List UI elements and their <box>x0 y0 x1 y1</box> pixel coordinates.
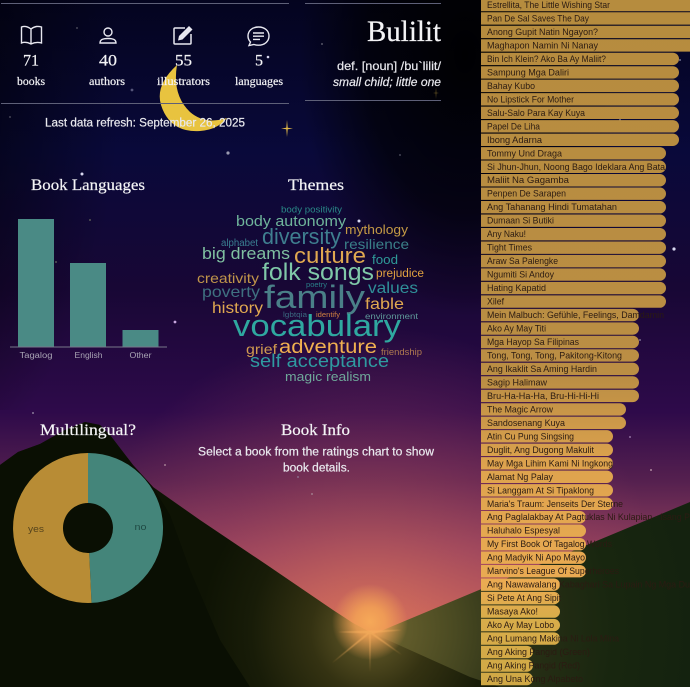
bar labels: Atin Cu Pung Singsing <box>487 431 574 442</box>
word cloud: environment <box>365 312 419 321</box>
bar labels: Ang Tahanang Hindi Tumatahan <box>487 202 617 213</box>
stat: books <box>17 26 45 88</box>
last data refresh: Last data refresh: September 26, 2025 <box>45 118 245 130</box>
bar labels: Si Pete At Ang Sipit <box>487 593 561 604</box>
title: Bulilit <box>367 15 442 48</box>
bar labels: Anong Gupit Natin Ngayon? <box>487 27 598 38</box>
word cloud: friendship <box>381 347 422 357</box>
bar chart <box>10 219 167 360</box>
panel: book info <box>198 422 435 474</box>
bar labels: Xilef <box>487 297 504 308</box>
word cloud: diversity <box>262 224 341 249</box>
bar labels: Ang Aking Pangid (Red) <box>487 661 580 672</box>
bar labels: No Lipstick For Mother <box>487 94 574 105</box>
bar labels: Bahay Kubo <box>487 81 535 92</box>
word cloud: mythology <box>345 222 409 237</box>
bar labels: Maria's Traum: Jenseits Der Sterne <box>487 499 623 510</box>
stat: languages: 5 <box>255 52 263 70</box>
bar labels: Dumaan Si Butiki <box>487 216 554 227</box>
bar labels: Ang Madyik Ni Apo Mayo <box>487 553 585 564</box>
heading: Book Languages <box>31 177 145 194</box>
bar labels: Tong, Tong, Tong, Pakitong-Kitong <box>487 350 622 361</box>
mountain: dark foreground <box>0 422 250 687</box>
bar labels: Estrellita, The Little Wishing Star <box>487 0 610 11</box>
moon <box>160 65 227 131</box>
header rules <box>1 4 441 104</box>
bar labels: Duglit, Ang Dugong Makulit <box>487 445 594 456</box>
panel: themes <box>197 177 424 384</box>
stat: books: books <box>17 74 45 88</box>
stat: languages: languages <box>235 74 283 88</box>
word cloud: vocabulary <box>233 308 402 343</box>
heading: Book Info <box>281 422 350 439</box>
panel: multilingual <box>13 422 163 603</box>
bar labels: Ako Ay May Lobo <box>487 620 554 631</box>
word cloud: family <box>264 279 365 315</box>
word cloud: body positivity <box>281 205 342 216</box>
bar labels: Pan De Sal Saves The Day <box>487 13 589 24</box>
stat: languages <box>235 27 283 88</box>
word cloud: folk songs <box>262 259 374 286</box>
word cloud: history <box>212 300 263 317</box>
instructions: Select a book from the ratings chart to show <box>198 446 435 458</box>
word cloud: self acceptance <box>250 351 389 371</box>
bar labels: Alamat Ng Palay <box>487 472 553 483</box>
bar labels: Mga Hayop Sa Filipinas <box>487 337 579 348</box>
bar labels: Hating Kapatid <box>487 283 546 294</box>
word cloud: food <box>372 252 398 267</box>
stat: authors: authors <box>89 74 125 88</box>
bar labels: Ngumiti Si Andoy <box>487 270 554 281</box>
word cloud: poverty <box>202 284 260 301</box>
word cloud <box>197 205 424 384</box>
definition: small child; little one <box>333 75 441 89</box>
definition: def. [noun] /bu`lilit/ <box>337 59 442 73</box>
bar labels: Ang Ikaklit Sa Aming Hardin <box>487 364 597 375</box>
instructions <box>198 446 435 474</box>
bar labels: Tight Times <box>487 243 532 254</box>
bar labels: Ako Ay May Titi <box>487 324 546 335</box>
icon: speech bubble <box>248 27 269 46</box>
bar chart: English <box>74 351 102 360</box>
bar labels: Sagip Halimaw <box>487 377 547 388</box>
definition <box>333 59 442 89</box>
bar labels: The Magic Arrow <box>487 404 553 415</box>
word cloud: values <box>368 280 418 297</box>
word cloud: adventure <box>279 337 377 358</box>
bar labels: Sandosenang Kuya <box>487 418 566 429</box>
word cloud: big dreams <box>202 244 290 263</box>
bar labels: Haluhalo Espesyal <box>487 526 560 537</box>
bar labels: Si Langgam At Si Tipaklong <box>487 485 594 496</box>
icon: pencil on square <box>174 26 192 44</box>
bar labels: Bin Ich Klein? Ako Ba Ay Maliit? <box>487 54 606 65</box>
bar labels: Tommy Und Draga <box>487 148 563 159</box>
word cloud: magic realism <box>285 369 371 384</box>
bar labels <box>487 0 690 685</box>
sun <box>332 584 408 672</box>
bar labels: Mein Malbuch: Gefühle, Feelings, Damdamin <box>487 310 664 321</box>
bar labels: Araw Sa Palengke <box>487 256 558 267</box>
donut chart: no <box>134 522 146 533</box>
stat: illustrators <box>157 26 210 88</box>
word cloud: body autonomy <box>236 213 347 230</box>
mountain: left ridge <box>0 422 500 687</box>
panel: book languages <box>10 177 167 360</box>
bar labels: Ang Una Kong Alpabeto <box>487 674 583 685</box>
ratings bar chart <box>475 0 690 685</box>
donut chart: yes <box>28 524 44 535</box>
bar labels: Salu-Salo Para Kay Kuya <box>487 108 586 119</box>
bar labels: Sampung Mga Daliri <box>487 67 569 78</box>
word cloud: identify <box>316 312 341 319</box>
word cloud: creativity <box>197 270 259 286</box>
stat: authors: 40 <box>99 52 117 70</box>
stat: illustrators: 55 <box>175 52 192 70</box>
bar labels: Masaya Ako! <box>487 607 538 618</box>
bar chart: Tagalog <box>20 351 52 360</box>
instructions: book details. <box>283 462 350 474</box>
bar chart: Other <box>130 351 152 360</box>
bar labels: Ibong Adarna <box>487 135 543 146</box>
mountain: right hill <box>360 502 690 687</box>
bar labels: My First Book Of Tagalog Words <box>487 539 612 550</box>
bar labels: Marvino's League Of Superheroes <box>487 566 619 577</box>
word cloud: resilience <box>344 236 409 252</box>
bar labels: Penpen De Sarapen <box>487 189 566 200</box>
bar labels: Maliit Na Gagamba <box>487 175 570 186</box>
stat: illustrators: illustrators <box>157 74 210 88</box>
bar labels: Any Naku! <box>487 229 526 240</box>
icon: person <box>100 28 116 43</box>
bar labels: May Mga Lihim Kami Ni Ingkong <box>487 458 613 469</box>
stat: books: 71 <box>23 52 39 70</box>
bar labels: Papel De Liha <box>487 121 541 132</box>
donut chart <box>13 453 163 603</box>
bar labels: Ang Aking Pangid (Green) <box>487 647 590 658</box>
word cloud: prejudice <box>376 268 424 280</box>
icon: open book <box>22 26 42 44</box>
bar labels: Si Jhun-Jhun, Noong Bago Ideklara Ang Bata <box>487 162 666 173</box>
word cloud: grief <box>246 341 277 357</box>
stars <box>9 27 681 495</box>
word cloud: alphabet <box>221 238 258 249</box>
word cloud: poetry <box>306 282 328 289</box>
bar labels: Bru-Ha-Ha-Ha, Bru-Hi-Hi-Hi <box>487 391 599 402</box>
heading: Multilingual? <box>40 422 136 439</box>
word cloud: fable <box>365 296 404 313</box>
word cloud: culture <box>294 243 366 268</box>
bar labels: Maghapon Namin Ni Nanay <box>487 40 598 51</box>
star: gold sparkle <box>281 87 439 137</box>
word cloud: lgbtqia <box>283 312 307 319</box>
heading: Themes <box>288 177 344 194</box>
stat: authors <box>89 28 125 88</box>
bar labels: Ang Lumang Makina Ni Lola Mina <box>487 634 620 645</box>
